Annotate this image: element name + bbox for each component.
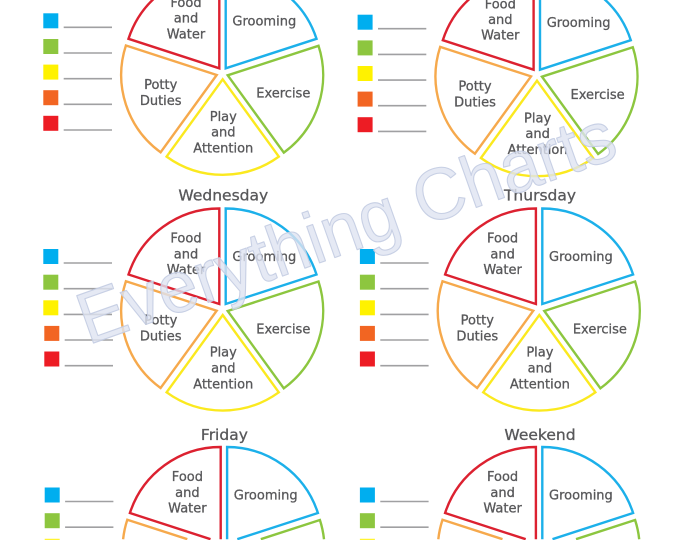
label: exercise: Exercise [573,322,627,337]
wedge: food and water [128,0,219,68]
wedge: potty duties [123,520,187,539]
label: potty duties: Potty [458,79,492,94]
label: play and attention: and [211,361,236,376]
wedge: potty duties [438,520,502,539]
label: food and water: Food [487,470,518,485]
label: play and attention: Play [210,346,237,361]
wedge: potty duties [438,281,533,388]
title: Weekend: Weekend [504,426,576,444]
wedge: play and attention [481,81,593,176]
label: play and attention: Attention [193,377,253,392]
legend [43,13,112,131]
label: potty duties: Potty [144,314,177,329]
label: food and water: and [174,247,198,262]
wedge: potty duties [121,46,217,152]
label: play and attention: Play [524,111,551,126]
legend [43,249,113,366]
panel: top-left pie chart (day title cropped) [43,0,323,175]
wedge: exercise [228,282,323,388]
label: potty duties: Duties [140,94,182,109]
label: food and water: and [175,486,200,501]
label: food and water: Water [167,263,206,278]
panel: Wednesday pie chart [43,187,323,411]
label: potty duties: Duties [456,330,498,345]
watermark: Everything Charts: Everything Charts [66,95,626,360]
label: play and attention: and [528,361,552,376]
panel: top-right pie chart (day title cropped) [358,0,637,176]
label: play and attention: and [211,126,236,141]
label: food and water: Water [483,263,522,278]
label: potty duties: Duties [454,95,496,110]
label: grooming: Grooming [547,16,611,31]
label: play and attention: and [525,127,550,142]
wedge: play and attention [167,79,279,175]
wedge: food and water [443,0,534,70]
label: food and water: and [490,247,515,262]
title: Wednesday: Wednesday [178,187,268,205]
wedge: grooming [226,0,316,68]
label: food and water: and [488,13,513,28]
label: grooming: Grooming [232,14,296,30]
wedge: potty duties [121,281,217,388]
wedge: exercise [542,47,637,154]
label: exercise: Exercise [256,87,310,102]
panel: Weekend pie chart [360,426,639,540]
label: exercise: Exercise [571,88,625,103]
wedge: potty duties [436,47,531,154]
wedge: grooming [542,447,633,539]
label: play and attention: Attention [510,377,570,392]
label: food and water: Food [172,470,203,485]
legend [358,15,426,132]
wedge: play and attention [167,315,279,411]
label: food and water: Water [168,502,207,517]
legend [360,249,429,366]
wedge: food and water [445,447,536,539]
label: potty duties: Potty [461,314,494,329]
title: Thursday: Thursday [503,187,576,205]
wedge: play and attention [483,315,595,411]
wedge: food and water [130,447,221,539]
label: grooming: Grooming [234,489,298,504]
wedge: exercise [576,520,639,539]
wedge: grooming [540,0,631,70]
title: Friday: Friday [201,426,248,444]
legend [45,488,113,540]
label: exercise: Exercise [256,322,310,337]
wedge: food and water [445,208,536,304]
wedge: exercise [261,520,324,539]
label: food and water: Food [487,232,518,247]
label: grooming: Grooming [232,250,296,265]
panel: Thursday pie chart [360,187,640,411]
legend [360,488,429,540]
label: play and attention: Play [210,110,237,125]
label: food and water: and [490,486,515,501]
label: food and water: Water [481,29,520,44]
label: food and water: Food [170,232,202,247]
wedge: exercise [228,46,323,153]
label: food and water: Water [167,27,206,42]
label: food and water: and [174,12,198,27]
label: potty duties: Duties [140,330,182,345]
wedge: food and water [128,208,219,304]
label: play and attention: Attention [508,143,568,158]
label: grooming: Grooming [549,250,613,265]
wedge: grooming [226,208,316,304]
wedge: grooming [542,208,633,304]
label: food and water: Water [483,502,522,517]
panel: Friday pie chart [45,426,324,540]
label: potty duties: Potty [144,78,177,93]
wedge: exercise [544,282,640,388]
label: play and attention: Play [526,346,553,361]
wedge: grooming [227,447,318,539]
label: play and attention: Attention [193,142,253,157]
label: grooming: Grooming [549,489,613,504]
